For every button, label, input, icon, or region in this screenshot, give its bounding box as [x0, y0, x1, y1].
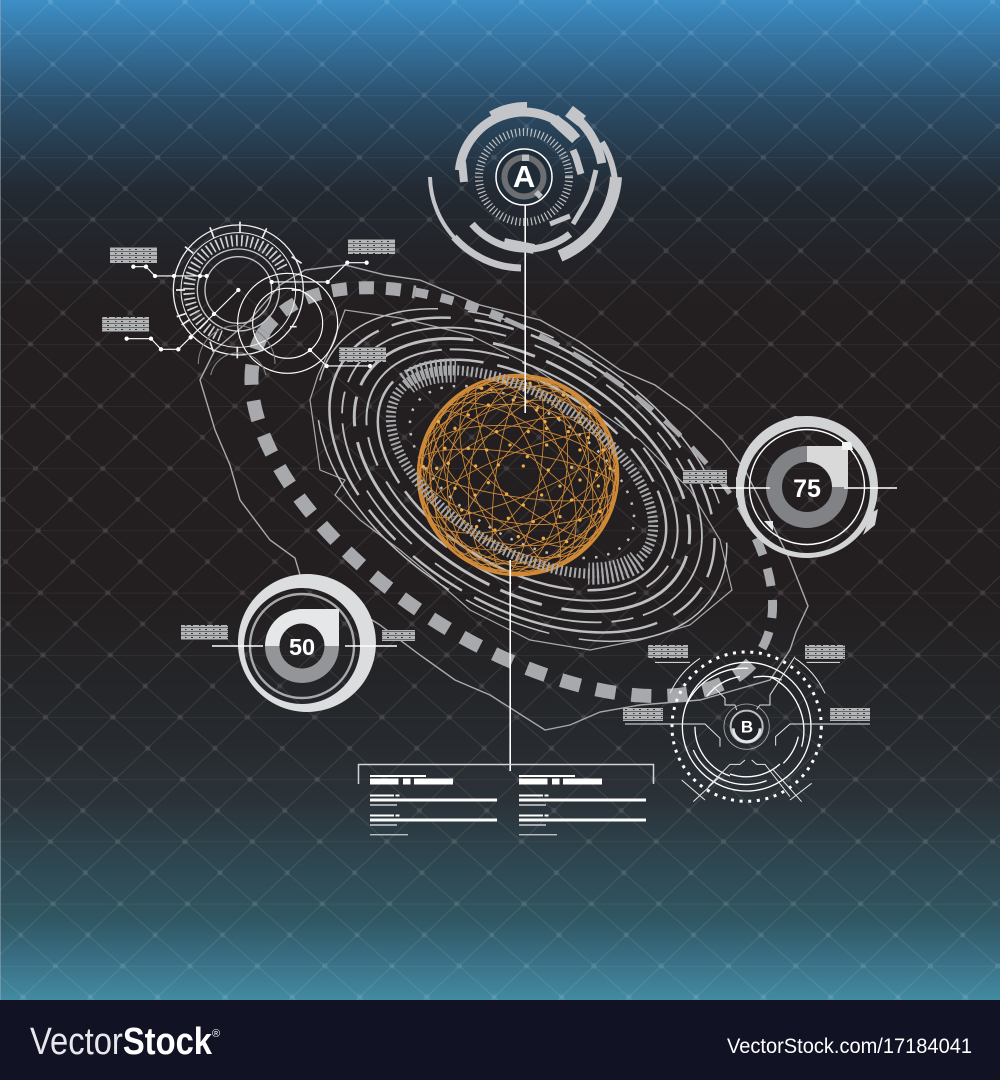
dotted ring	[672, 652, 821, 801]
orbital system	[183, 206, 841, 778]
label block	[623, 708, 663, 721]
circuit traces	[625, 657, 870, 802]
label block	[339, 347, 386, 362]
left edge highlight	[0, 0, 1, 1000]
inner gray ring	[250, 594, 354, 698]
label block	[102, 317, 149, 332]
widget 50 gauge	[212, 574, 397, 712]
outer gear outline	[200, 265, 808, 730]
label block	[382, 630, 415, 641]
table bracket	[358, 764, 654, 784]
tick ring around planet	[357, 329, 687, 615]
label block	[181, 625, 228, 640]
label block	[805, 645, 845, 659]
donut remaining segment	[265, 646, 339, 683]
hub progress arc	[733, 728, 760, 742]
corner marker top	[842, 442, 853, 450]
dial inner ring	[504, 158, 544, 196]
outer rings with ticks	[173, 222, 303, 358]
main ring	[682, 662, 811, 791]
connector line: A to planet	[524, 205, 526, 413]
value 50: 50	[289, 634, 315, 660]
corner marker bottom	[764, 521, 773, 531]
inner rings	[197, 249, 279, 331]
data table	[358, 764, 654, 835]
concentric segmented rings	[258, 240, 786, 710]
lower gray arcs	[198, 326, 275, 375]
data labels	[102, 239, 870, 721]
donut remaining segment	[774, 454, 840, 520]
overlapping lens circle	[238, 273, 338, 373]
connector line: planet to table	[509, 560, 511, 771]
sphere nodes	[423, 382, 610, 542]
broken outer arcs	[430, 108, 616, 268]
tick ring	[479, 132, 569, 222]
letter A: A	[513, 159, 535, 194]
donut value segment	[265, 609, 339, 646]
dial light chips	[522, 154, 543, 199]
footer bar	[0, 1000, 1000, 1080]
dashed orbit band	[183, 206, 841, 778]
label block	[648, 645, 688, 658]
gauge cross lines	[212, 645, 397, 647]
label block	[830, 708, 870, 721]
inner arcs	[687, 668, 804, 785]
footer logo: VectorStock	[30, 1021, 213, 1063]
inner dotted ring	[381, 351, 663, 593]
widget A	[430, 108, 616, 268]
sphere meridians	[379, 336, 657, 614]
table column right	[519, 775, 646, 835]
label block	[110, 247, 157, 263]
label block	[683, 470, 727, 484]
donut value segment	[807, 446, 848, 487]
letter B: B	[741, 718, 753, 737]
irregular outer ring	[736, 416, 878, 558]
registered mark: ®	[212, 1028, 220, 1040]
connector nodes	[127, 263, 370, 366]
gauge cross lines	[709, 487, 897, 489]
widget top-left radar	[127, 222, 370, 375]
radial ticks	[189, 241, 282, 336]
value 75: 75	[793, 475, 821, 503]
hub ring	[731, 711, 763, 743]
widget 75 gauge	[709, 416, 897, 558]
label block	[348, 239, 395, 254]
footer image id: VectorStock.com/17184041	[727, 1035, 972, 1058]
widget B target	[625, 652, 870, 802]
wireframe planet	[379, 336, 657, 614]
connector lines	[127, 263, 370, 366]
ring bumps	[736, 416, 878, 535]
inner thin ring	[750, 430, 864, 544]
irregular outer ring	[238, 574, 376, 712]
table column left	[370, 775, 497, 835]
central dial	[496, 149, 552, 205]
central hub	[724, 704, 769, 749]
inner gear outline	[310, 310, 732, 650]
